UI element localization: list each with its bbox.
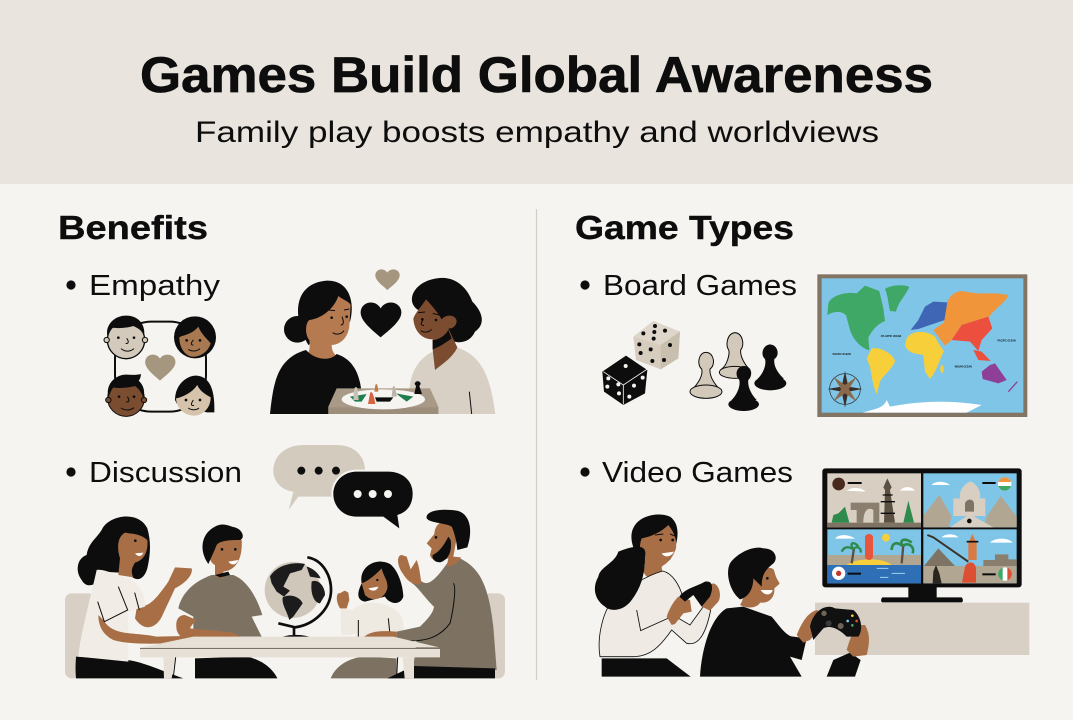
bullet: board games: Board Games [603, 270, 797, 302]
bullet: video games: Video Games [602, 457, 793, 489]
pawn: beige front [690, 352, 722, 398]
heart: black [361, 303, 401, 337]
greenland [885, 285, 909, 312]
face 4 [175, 376, 214, 416]
right person [409, 278, 495, 414]
asia [933, 291, 1008, 346]
africa [905, 332, 944, 379]
bench [65, 593, 505, 678]
illustration: dice and pawns [602, 321, 786, 411]
ocean labels: INDIAN OCEAN [955, 366, 972, 369]
bullet: empathy: Empathy [89, 270, 221, 302]
face 2 [174, 316, 216, 358]
board game [328, 381, 438, 414]
antarctica [863, 400, 982, 413]
speech bubble: beige [273, 445, 365, 510]
illustration: video game TV and players [595, 468, 1029, 677]
madagascar [940, 365, 944, 373]
icon: empathy circle of faces [104, 316, 216, 416]
illustration: two people over a board game [270, 269, 495, 414]
ocean labels [833, 335, 1016, 369]
boy [176, 524, 277, 678]
illustration: world map board [817, 274, 1027, 417]
pawn: black front [728, 366, 759, 411]
left person [270, 281, 362, 414]
europe [911, 302, 947, 330]
compass rose [827, 371, 863, 408]
speech bubble: black [333, 472, 413, 528]
globe [265, 557, 331, 640]
north america [827, 286, 885, 350]
heading: benefits: Benefits [58, 209, 208, 246]
boy with controller [700, 548, 869, 677]
heart: taupe [375, 269, 400, 290]
girl [331, 562, 404, 678]
heading: game types: Game Types [575, 209, 794, 246]
south america [867, 348, 895, 394]
screen: top left [827, 473, 921, 527]
girl with controller [595, 515, 720, 677]
die: black [602, 356, 647, 405]
table [140, 637, 440, 678]
title: Games Build Global Awareness [140, 47, 933, 103]
woman [76, 517, 199, 678]
australia [982, 363, 1007, 383]
illustration: family discussing around a globe [65, 445, 505, 678]
tv stand table [815, 603, 1029, 655]
new zealand [1008, 382, 1017, 392]
pawn: beige back [719, 333, 751, 378]
screen: bottom right [923, 529, 1017, 583]
ocean labels: PACIFIC OCEAN [833, 353, 851, 356]
bullet: discussion: Discussion [89, 457, 242, 489]
tv [822, 468, 1022, 602]
man [363, 510, 497, 678]
header band [0, 0, 1073, 184]
screen: top right [923, 473, 1017, 527]
screen: bottom left [827, 529, 921, 583]
ocean labels: PACIFIC OCEAN [998, 340, 1016, 343]
face 1 [104, 316, 148, 359]
pawn: black right [754, 344, 786, 390]
subtitle: Family play boosts empathy and worldviews [195, 116, 879, 149]
die: beige [633, 321, 680, 369]
southeast asia [973, 350, 991, 361]
face 3 [106, 374, 147, 416]
china and south asia [952, 317, 992, 351]
ocean labels: ATLANTIC OCEAN [881, 335, 902, 338]
